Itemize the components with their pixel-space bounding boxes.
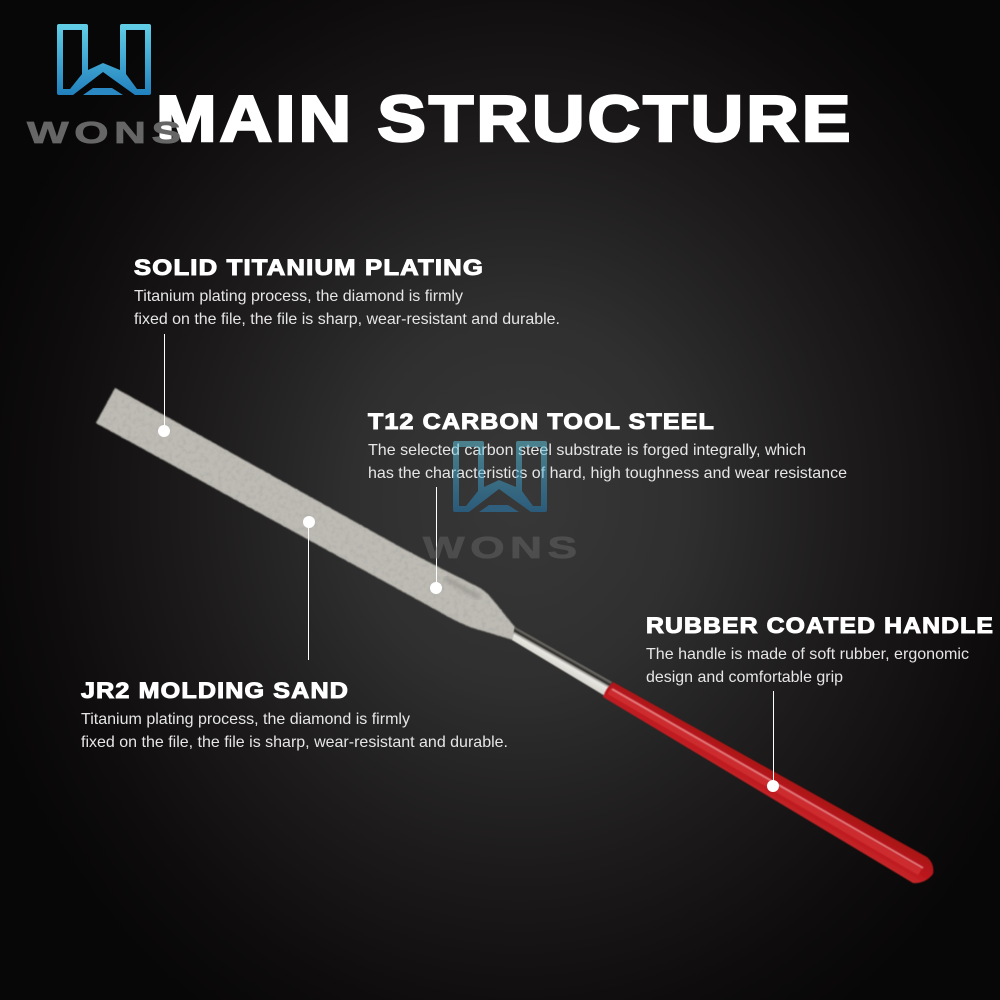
callout: rubber coated handle	[646, 613, 994, 792]
callout: JR2 molding sand: Titanium plating process, the diamond is firmly	[81, 711, 410, 728]
callout: rubber coated handle: design and comfortable grip	[646, 669, 843, 686]
callout: T12 carbon tool steel	[368, 409, 847, 594]
watermark logo: center	[423, 441, 583, 565]
callout: rubber coated handle: The handle is made of soft rubber, ergonomic	[646, 646, 969, 663]
file: red rubber handle	[603, 682, 933, 883]
callout: solid titanium plating: SOLID TITANIUM PLATING	[134, 255, 484, 280]
callout: rubber coated handle: RUBBER COATED HANDLE	[646, 613, 994, 638]
callout: T12 carbon tool steel: The selected carbon steel substrate is forged integrally, which	[368, 442, 806, 459]
callout: T12 carbon tool steel: has the characteristics of hard, high toughness and wear resistance	[368, 465, 847, 482]
callout: JR2 molding sand	[81, 516, 508, 751]
watermark logo: center: WONS	[423, 531, 583, 565]
callout: JR2 molding sand: JR2 MOLDING SAND	[81, 678, 349, 703]
callout: JR2 molding sand: fixed on the file, the file is sharp, wear-resistant and durable.	[81, 734, 508, 751]
callout: solid titanium plating: Titanium plating process, the diamond is firmly	[134, 288, 463, 305]
callout: solid titanium plating	[134, 255, 560, 437]
logo: WONS top left	[27, 24, 187, 150]
file: diamond blade	[96, 388, 515, 640]
file: steel shank	[512, 627, 612, 696]
callout: T12 carbon tool steel: T12 CARBON TOOL STEEL	[368, 409, 715, 434]
callout: solid titanium plating: fixed on the file, the file is sharp, wear-resistant and durable.	[134, 311, 560, 328]
title: MAIN STRUCTURE	[156, 83, 853, 155]
logo: WONS top left: WONS	[27, 116, 187, 150]
